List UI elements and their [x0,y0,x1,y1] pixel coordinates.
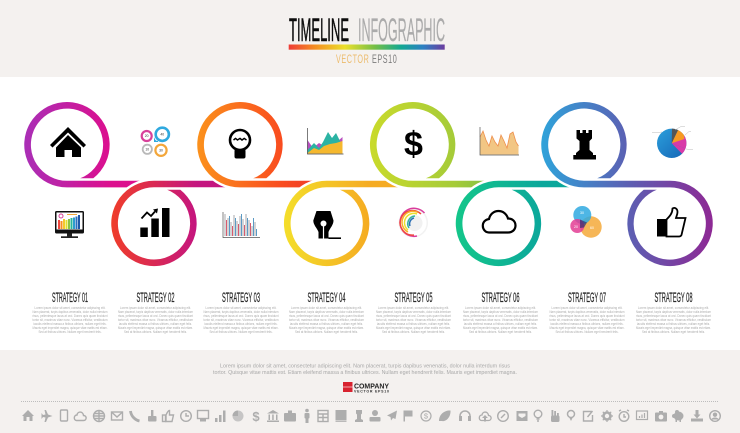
calculator [318,410,328,422]
photo [336,410,346,422]
paper plane [387,410,397,420]
download [691,410,703,422]
strategy 04 [289,289,364,334]
strategy 07: Lorem ipsum dolor sit amet, consectetur adipiscing elit. [552,306,622,310]
strategy 08: risus, pellentesque lacus at orci. Donec quis quam tincidunt [636,314,711,318]
strategy 03: risus, pellentesque lacus at orci. Donec quis quam tincidunt [204,314,278,318]
strategy 03: Lorem ipsum dolor sit amet, consectetur adipiscing elit. [206,306,276,310]
title: TIMELINE [289,12,349,48]
icon: thumbs up [657,208,686,236]
strategy 08: iaculis eleifend massa a finibus ultrices, nullam eget felis. [637,322,710,326]
chart: pie [652,126,693,158]
gear [601,410,613,422]
header band [0,0,740,77]
bulb [534,410,542,421]
subtitle: VECTOR [336,53,369,67]
icon: cloud [483,211,516,232]
strategy 06: Mauris eget imperdiet magna, quisque vitae mattis est etiam. [463,326,538,330]
chart: venn circles [570,206,602,238]
strategy 06: Lorem ipsum dolor sit amet, consectetur adipiscing elit. [465,306,536,310]
strategy 02: iaculis eleifend massa a finibus ultrices, nullam eget felis. [119,322,192,326]
strategy 03: iaculis eleifend massa a finibus ultrices, nullam eget felis. [204,322,278,326]
strategy 07 [550,289,624,334]
rook [355,410,363,422]
chart: rainbow donut [399,208,427,237]
strategy 02: STRATEGY 02 [136,289,175,305]
compass [498,411,508,421]
footer band [0,350,740,433]
plane [42,410,52,422]
subtitle: EPS10 [372,53,397,67]
pie [232,410,244,422]
strategy 02: Mauris eget imperdiet magna, quisque vitae mattis est etiam. [118,326,193,330]
strategy 05: Lorem ipsum dolor sit amet, consectetur adipiscing elit. [378,306,449,310]
strategy 08: Sed at finibus ultrices. Nullam eget hendrerit felis. [642,330,705,334]
dollar: $ [252,409,260,424]
ring 6 [456,181,576,266]
strategy 06: Nam placerat, turpis dapibus venenatis, dolor nulla interdum [463,310,538,314]
person [304,409,310,423]
chart: venn circles: 60 [590,226,594,230]
strategy 02 [118,289,193,334]
strategy 07: Nam placerat, turpis dapibus venenatis, dolor nulla interdum [550,310,624,314]
ring 3 gap [201,105,279,184]
strategy 06: tortor sit, maximus vitae nunc. Vivamus efficitur, vestibulum [463,318,538,322]
mail [112,412,122,420]
strategy 03: Mauris eget imperdiet magna, quisque vitae mattis est etiam. [204,326,278,330]
strategy 07: risus, pellentesque lacus at orci. Donec quis quam tincidunt [550,314,624,318]
hand [551,410,560,422]
ring 6 gap [459,184,538,263]
strategy 03: Sed at finibus ultrices. Nullam eget hendrerit felis. [210,330,272,334]
strategy 02: tortor sit, maximus vitae nunc. Vivamus efficitur, vestibulum [118,318,193,322]
text: INFOGRAPHIC [358,12,445,48]
icon: rook [573,130,596,160]
strategy 01: Sed at finibus ultrices. Nullam eget hendrerit felis. [38,330,102,334]
strategy 04: Nam placerat, turpis dapibus venenatis, dolor nulla interdum [289,310,364,314]
note [584,411,592,421]
strategy 04: Mauris eget imperdiet magna, quisque vitae mattis est etiam. [289,326,364,330]
strategy 04: iaculis eleifend massa a finibus ultrices, nullam eget felis. [290,322,363,326]
strategy 04: Sed at finibus ultrices. Nullam eget hendrerit felis. [295,330,358,334]
strategy 06 [463,289,538,334]
strategy 07: Mauris eget imperdiet magna, quisque vitae mattis est etiam. [550,326,624,330]
ring 7 gap [545,105,623,184]
headphones [459,411,471,421]
monitor [198,410,208,422]
strategy 05: Sed at finibus ultrices. Nullam eget hendrerit felis. [382,330,445,334]
strategy 03 [204,289,278,334]
strategy 08: Nam placerat, turpis dapibus venenatis, dolor nulla interdum [636,310,711,314]
ring 5 [370,102,491,187]
chart: monitor with bars [55,211,84,238]
strategy 05: risus, pellentesque lacus at orci. Donec quis quam tincidunt [376,314,451,318]
strategy 01: risus, pellentesque lacus at orci. Donec quis quam tincidunt [32,314,108,318]
subtitle [336,53,397,67]
rings 7 and 8 [541,102,713,266]
upload cloud [479,412,491,422]
strategy 01 [32,289,108,334]
clock [181,411,191,421]
chart: four number donuts: 20 [145,134,149,138]
chart: four number donuts [142,128,169,156]
strategy 01: Nam placerat, turpis dapibus venenatis, dolor nulla interdum [32,310,108,314]
strategy 03: Nam placerat, turpis dapibus venenatis, dolor nulla interdum [204,310,278,314]
thumb [162,410,174,422]
strategy 05 [376,289,451,334]
icon: rising bars [140,208,170,237]
chart: thin bars [223,212,260,238]
strategy 07: iaculis eleifend massa a finibus ultrices, nullam eget felis. [550,322,624,326]
coin: $ [424,412,429,421]
chart: venn circles: 30 [580,211,584,215]
strategy 01: Mauris eget imperdiet magna, quisque vitae mattis est etiam. [32,326,108,330]
chart: four number donuts: 10 [145,148,149,152]
bars [215,410,226,422]
ring 3 [197,102,318,187]
rainbow bar [289,44,445,50]
company logo: COMPANY [354,382,389,390]
user badge [710,411,720,421]
chart: venn circles: 20 [574,225,578,229]
touch [148,410,156,422]
strategy 01: tortor sit, maximus vitae nunc. Vivamus efficitur, vestibulum [32,318,108,322]
pin [568,410,574,421]
strategy 05: tortor sit, maximus vitae nunc. Vivamus efficitur, vestibulum [376,318,451,322]
chart: layered area [308,128,344,154]
strategy 04: STRATEGY 04 [308,289,346,305]
ring 2 gap [115,184,193,263]
leaf [439,410,451,421]
company logo [343,382,389,394]
strategy 02: Sed at finibus ultrices. Nullam eget hendrerit felis. [124,330,187,334]
briefcase [284,410,296,422]
icon: house [50,127,86,157]
chart: four number donuts: 40 [160,132,164,136]
ring 4 [284,181,405,266]
inbox [516,411,528,421]
strategy 05: STRATEGY 05 [394,289,433,305]
strategy 04: tortor sit, maximus vitae nunc. Vivamus efficitur, vestibulum [289,318,364,322]
strategy 06: iaculis eleifend massa a finibus ultrices, nullam eget felis. [464,322,537,326]
footer icon row [22,409,720,424]
presentation [636,411,648,420]
strategy 08 [636,289,711,334]
camera [655,411,667,422]
bust [370,410,380,422]
strategy 08: Mauris eget imperdiet magna, quisque vitae mattis est etiam. [636,326,711,330]
strategy 05: iaculis eleifend massa a finibus ultrices, nullam eget felis. [377,322,450,326]
icon: dollar: $ [404,126,423,164]
footer text: tortor. Quisque vitae mattis est. Etiam eleifend massa a finibus ultrices. Nullam eget hendrerit felis. Mauris eget imperdiet magna. [213,370,517,376]
bank [267,410,279,422]
company logo: VECTOR EPS10 [354,390,389,394]
tablet [60,410,68,421]
strategy 05: Nam placerat, turpis dapibus venenatis, dolor nulla interdum [376,310,451,314]
cloud [74,412,86,420]
footer text: Lorem ipsum dolor sit amet, consectetur adipiscing elit. Nam placerat, turpis dapibus venenatis, dolor nulla interdum risus [220,364,510,370]
home [22,410,34,421]
ring 1 [24,102,145,187]
strategy 06: Sed at finibus ultrices. Nullam eget hendrerit felis. [469,330,532,334]
strategy 06: risus, pellentesque lacus at orci. Donec quis quam tincidunt [463,314,538,318]
strategy 08: tortor sit, maximus vitae nunc. Vivamus efficitur, vestibulum [636,318,711,322]
strategy 02: risus, pellentesque lacus at orci. Donec quis quam tincidunt [118,314,193,318]
icon: pen nib [313,211,341,239]
chart: orange area [480,127,519,155]
strategy 03: tortor sit, maximus vitae nunc. Vivamus efficitur, vestibulum [204,318,278,322]
strategy 01: STRATEGY 01 [52,289,88,305]
strategy 07: tortor sit, maximus vitae nunc. Vivamus efficitur, vestibulum [550,318,624,322]
piggy [672,410,684,422]
footer text [213,364,517,376]
handset [130,411,140,421]
strategy 08: Lorem ipsum dolor sit amet, consectetur adipiscing elit. [638,306,709,310]
globe [94,410,104,422]
ring 2 [111,181,232,266]
strategy 07: STRATEGY 07 [568,289,606,305]
strategy 04: risus, pellentesque lacus at orci. Donec quis quam tincidunt [289,314,364,318]
strategy 01: Lorem ipsum dolor sit amet, consectetur adipiscing elit. [34,306,106,310]
timeline ribbon [24,102,713,266]
icon: light bulb [230,130,250,158]
strategy 07: Sed at finibus ultrices. Nullam eget hendrerit felis. [556,330,618,334]
strategy 05: Mauris eget imperdiet magna, quisque vitae mattis est etiam. [376,326,451,330]
flag [404,410,412,422]
strategy 04: Lorem ipsum dolor sit amet, consectetur adipiscing elit. [291,306,362,310]
strategy 02: Nam placerat, turpis dapibus venenatis, dolor nulla interdum [118,310,193,314]
alarm [619,410,629,421]
strategy 01: iaculis eleifend massa a finibus ultrices, nullam eget felis. [34,322,106,326]
coin [421,411,431,421]
ring 5 gap [373,105,452,184]
strategy 02: Lorem ipsum dolor sit amet, consectetur adipiscing elit. [120,306,191,310]
chart: four number donuts: 30 [159,148,163,152]
ring 4 gap [287,184,366,263]
strategy 06: STRATEGY 06 [482,289,520,305]
strategy 03: STRATEGY 03 [222,289,260,305]
